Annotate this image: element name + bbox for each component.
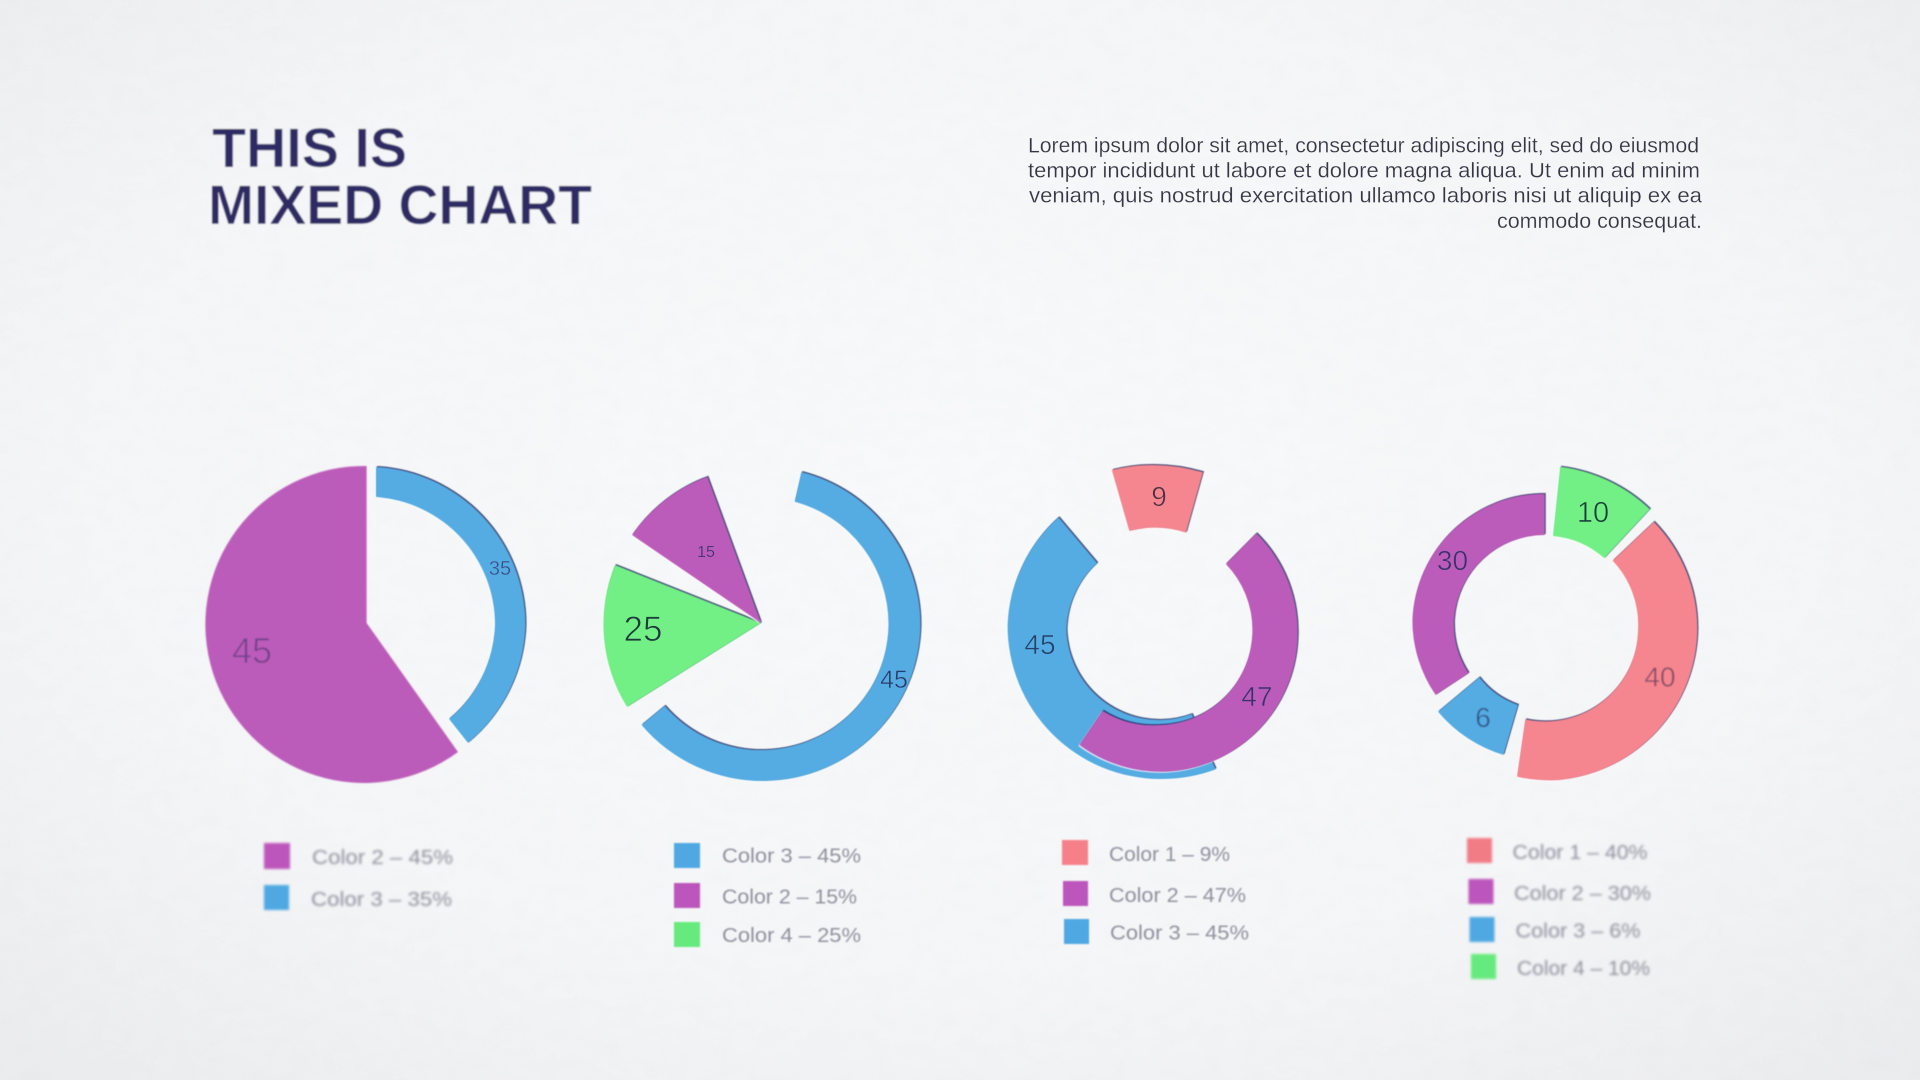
legend: chart 2 — [674, 843, 861, 947]
pie slice: color 2, 45 — [205, 466, 458, 783]
ring segment: color 1, 40 — [1517, 522, 1697, 780]
value label 25: 25 — [624, 610, 662, 649]
description paragraph: veniam, quis nostrud exercitation ullamco laboris nisi ut aliquip ex ea — [1029, 184, 1702, 208]
value label 10: 10 — [1577, 497, 1609, 529]
legend: chart 3 — [1062, 840, 1249, 944]
value label 47: 47 — [1241, 681, 1273, 712]
legend: chart 3: Color 1 – 9% — [1109, 844, 1230, 866]
legend: chart 1 — [264, 843, 453, 911]
ring segment: color 3, 6 — [1438, 677, 1518, 755]
ring segment: color 3, 35 — [376, 467, 526, 743]
legend: chart 4: Color 1 – 40% — [1512, 842, 1648, 864]
title: MIXED CHART — [208, 173, 592, 236]
value label 35: 35 — [489, 558, 511, 580]
title: THIS IS — [212, 116, 407, 179]
legend: chart 4 — [1467, 838, 1651, 980]
title — [208, 116, 592, 236]
panel: chart 4 — [1412, 467, 1697, 780]
legend: chart 3: Color 3 – 45% — [1110, 922, 1249, 944]
legend: chart 4: Color 2 – 30% — [1514, 883, 1651, 905]
ring segment: color 3, 45 — [642, 472, 920, 781]
description paragraph — [1028, 134, 1702, 233]
ring segment: color 4, 10 — [1553, 467, 1650, 558]
panel: chart 3 — [1008, 465, 1298, 779]
description paragraph: commodo consequat. — [1497, 210, 1702, 233]
legend: chart 2: Color 2 – 15% — [722, 886, 857, 908]
ring segment: color 2, 30 — [1412, 494, 1545, 695]
legend: chart 2: Color 4 – 25% — [722, 925, 861, 947]
value label 45: 45 — [1024, 629, 1056, 660]
ring segment: color 2, 47 — [1079, 533, 1298, 772]
legend: chart 2: Color 3 – 45% — [722, 846, 861, 868]
pie slice: color 4, 25 — [603, 565, 761, 707]
value label 9: 9 — [1151, 481, 1167, 512]
ring segment: color 3, 45 — [1008, 517, 1216, 779]
legend: chart 1: Color 3 – 35% — [311, 889, 452, 911]
panel: chart 2 — [603, 472, 920, 781]
legend: chart 3: Color 2 – 47% — [1109, 885, 1246, 907]
value label 45: 45 — [880, 666, 908, 694]
ring segment: color 1, 9 — [1112, 465, 1203, 533]
legend: chart 1: Color 2 – 45% — [312, 847, 453, 869]
value label 30: 30 — [1437, 545, 1468, 576]
value label 15: 15 — [697, 544, 715, 561]
value label 40: 40 — [1644, 662, 1676, 692]
panel: chart 1 — [205, 466, 526, 783]
value label 45: 45 — [232, 630, 272, 671]
pie slice: color 2, 15 — [632, 477, 761, 623]
description paragraph: tempor incididunt ut labore et dolore magna aliqua. Ut enim ad minim — [1028, 160, 1700, 182]
legend: chart 4: Color 4 – 10% — [1517, 958, 1650, 980]
legend: chart 4: Color 3 – 6% — [1516, 920, 1641, 942]
value label 6: 6 — [1475, 702, 1491, 733]
description paragraph: Lorem ipsum dolor sit amet, consectetur adipiscing elit, sed do eiusmod — [1028, 134, 1699, 158]
